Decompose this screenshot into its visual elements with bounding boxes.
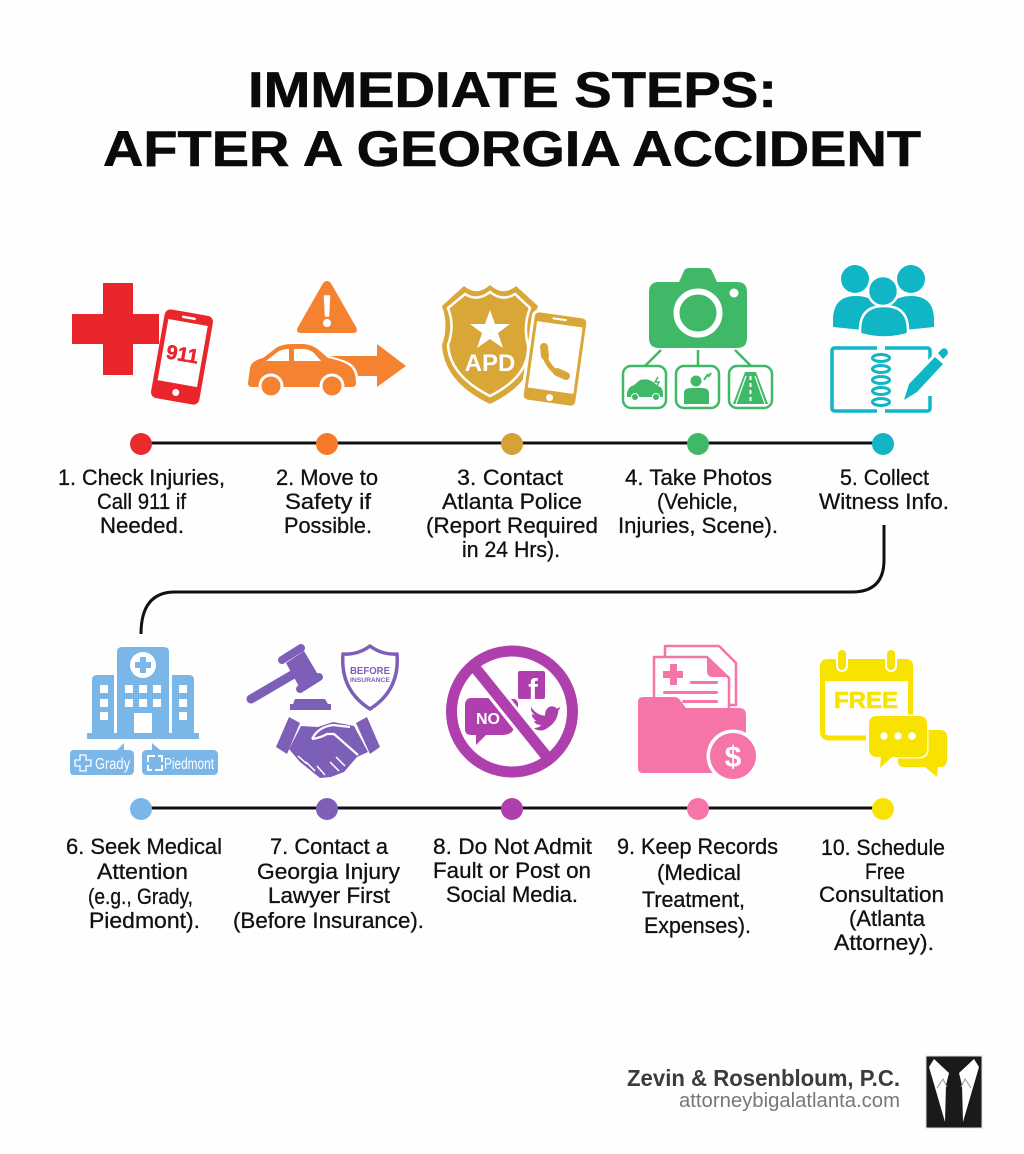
label 6: (e.g., Grady, (88, 884, 193, 909)
timeline row 2 line (141, 806, 883, 810)
label 7: Georgia Injury (257, 859, 400, 884)
timeline dot 2 (316, 433, 338, 455)
label 10 (819, 835, 945, 955)
label 8 (433, 834, 592, 907)
icon: free calendar and chat bubbles: FREE (834, 687, 898, 713)
label 10: Consultation (819, 882, 944, 907)
label 4: Injuries, Scene). (618, 513, 778, 538)
icon: gavel, shield and handshake: INSURANCE (350, 677, 391, 684)
label 1: 1. Check Injuries, (58, 465, 225, 490)
label 4: (Vehicle, (657, 489, 738, 514)
label 5 (819, 465, 949, 514)
label 10: Free (865, 859, 905, 884)
label 4: 4. Take Photos (625, 465, 772, 490)
label 1: Needed. (100, 513, 184, 538)
icon: witnesses and notebook (832, 265, 948, 411)
label 8: Social Media. (446, 882, 578, 907)
label 2: Possible. (284, 513, 372, 538)
icon: hospital with Grady and Piedmont tags (70, 647, 218, 775)
step 6: seek medical attention (66, 647, 222, 933)
label 7: (Before Insurance). (233, 908, 424, 933)
step 4: take photos (618, 268, 778, 538)
label 9: 9. Keep Records (617, 834, 778, 859)
label 9: Treatment, (642, 887, 745, 912)
label 5: Witness Info. (819, 489, 949, 514)
icon: camera with three photo boxes (623, 268, 772, 408)
label 9: Expenses). (644, 913, 751, 938)
title: IMMEDIATE STEPS: (248, 62, 777, 118)
label 7: 7. Contact a (270, 834, 389, 859)
icon: folder with medical records and dollar: $ (725, 741, 742, 774)
step 9: keep records (617, 646, 778, 938)
icon: folder with medical records and dollar (638, 646, 760, 782)
step 7: contact lawyer (233, 646, 424, 933)
icon: APD badge and phone: APD (465, 350, 515, 377)
footer firm name and website (627, 1065, 900, 1112)
icon: red cross and 911 phone (72, 283, 214, 406)
step 1: check injuries (58, 283, 225, 538)
label 5: 5. Collect (840, 465, 929, 490)
label 3: 3. Contact (457, 465, 563, 490)
label 3: Atlanta Police (442, 489, 582, 514)
icon: gavel, shield and handshake (251, 646, 397, 778)
label 8: 8. Do Not Admit (433, 834, 592, 859)
icon: warning, car and arrow (248, 281, 406, 398)
icon: red cross and 911 phone: 911 (165, 341, 200, 369)
label 10: Attorney). (834, 930, 934, 955)
timeline dot 7 (316, 798, 338, 820)
label 7: Lawyer First (268, 883, 390, 908)
label 10: 10. Schedule (821, 835, 945, 860)
timeline dot 5 (872, 433, 894, 455)
icon: no social media prohibition sign (452, 651, 572, 772)
timeline dot 6 (130, 798, 152, 820)
label 8: Fault or Post on (433, 858, 591, 883)
icon: no social media prohibition sign: NO (476, 711, 500, 728)
label 9 (617, 834, 778, 938)
label 4 (618, 465, 778, 538)
step 10: schedule consultation (819, 649, 947, 955)
label 2: 2. Move to (276, 465, 378, 490)
timeline dot 1 (130, 433, 152, 455)
label 3: in 24 Hrs). (462, 537, 560, 562)
label 3: (Report Required (426, 513, 598, 538)
icon: APD badge and phone (442, 285, 589, 408)
timeline row 1 line (141, 442, 883, 444)
timeline dot 10 (872, 798, 894, 820)
footer firm name and website: attorneybigalatlanta.com (679, 1090, 900, 1112)
step 8: do not admit fault (433, 651, 592, 907)
label 3 (426, 465, 598, 562)
title: AFTER A GEORGIA ACCIDENT (103, 121, 921, 177)
label 1 (58, 465, 225, 538)
connector between rows (141, 525, 884, 634)
label 10: (Atlanta (849, 906, 926, 931)
footer firm name and website: Zevin & Rosenbloum, P.C. (627, 1065, 900, 1091)
label 6: Attention (97, 859, 188, 884)
step 3: contact police (426, 285, 598, 562)
label 1: Call 911 if (97, 489, 187, 514)
label 2 (276, 465, 378, 538)
step 5: collect witness info (819, 265, 949, 514)
icon: no social media prohibition sign: f (528, 674, 538, 706)
title (103, 62, 921, 177)
footer logo: suit and tie (926, 1056, 982, 1128)
timeline dot 3 (501, 433, 523, 455)
icon: free calendar and chat bubbles (820, 649, 947, 777)
step 2: move to safety (248, 281, 406, 538)
label 6 (66, 834, 222, 933)
icon: gavel, shield and handshake: BEFORE (350, 666, 390, 677)
icon: hospital with Grady and Piedmont tags: Piedmont (164, 756, 215, 773)
label 6: 6. Seek Medical (66, 834, 222, 859)
label 6: Piedmont). (89, 908, 200, 933)
timeline dot 4 (687, 433, 709, 455)
timeline dot 8 (501, 798, 523, 820)
timeline dot 9 (687, 798, 709, 820)
label 7 (233, 834, 424, 933)
label 9: (Medical (657, 860, 741, 885)
icon: hospital with Grady and Piedmont tags: Grady (95, 756, 130, 773)
label 2: Safety if (285, 489, 372, 514)
